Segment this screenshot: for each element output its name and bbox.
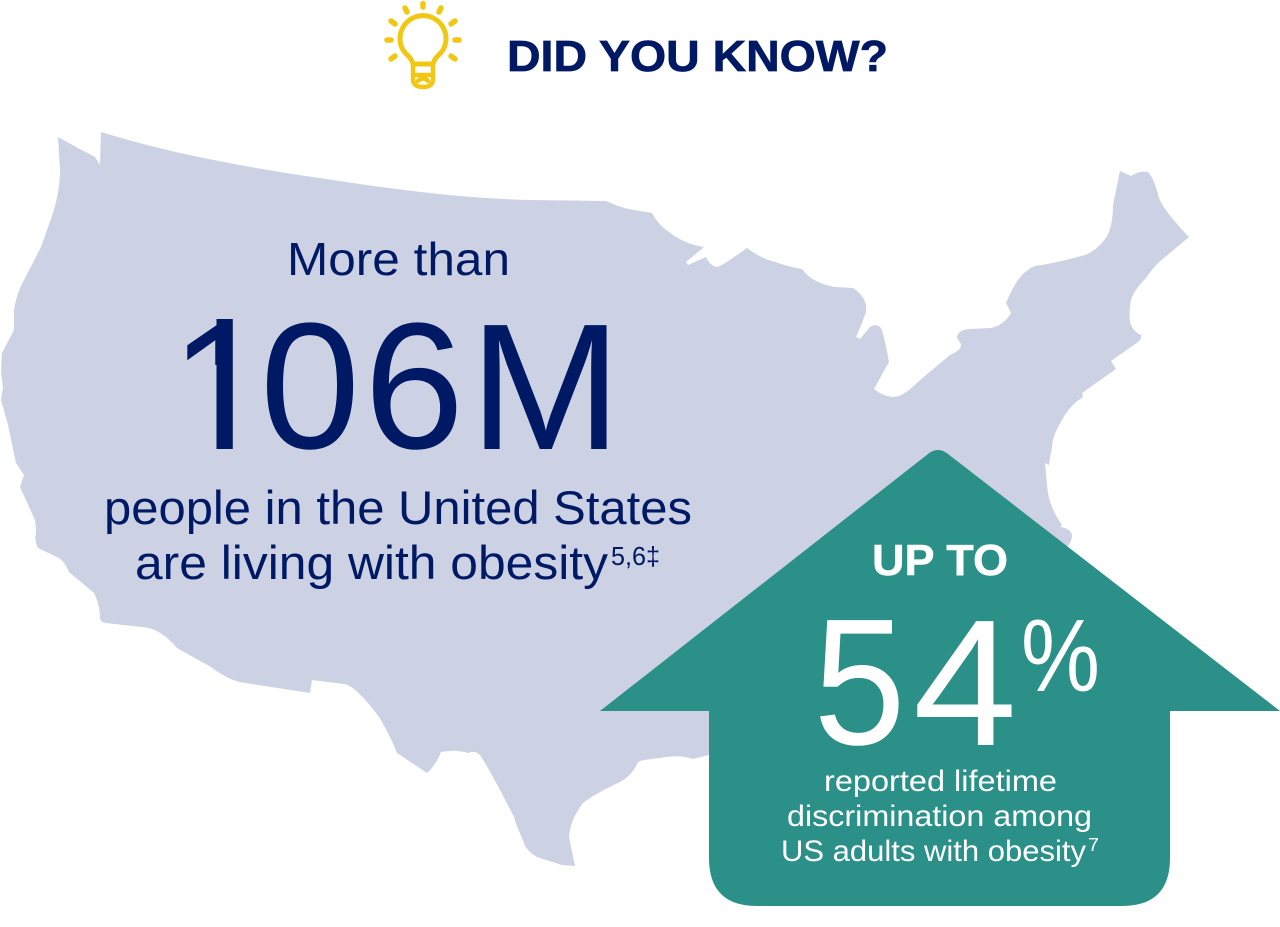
- big number: 106M: 0: [260, 286, 360, 487]
- text: reported lifetime discrimination: US adults with obesity: [781, 835, 1086, 868]
- big number: 106M: M: [470, 287, 622, 488]
- text: reported lifetime discrimination: discrimination among: [787, 800, 1092, 833]
- big number: 106M: [187, 319, 606, 450]
- heading: DID YOU KNOW?: [507, 32, 888, 81]
- panel: header: [387, 4, 888, 87]
- text: more than: More than: [287, 233, 510, 285]
- big number: 54 percent: 4: [913, 583, 1017, 784]
- text: reported lifetime discrimination: 7: [1088, 835, 1099, 855]
- text: up to: UP TO: [872, 536, 1008, 585]
- map of the United States: [1, 132, 1189, 866]
- text: people in the United States: people in the United States: [104, 482, 692, 535]
- panel: upward arrow statistic: [600, 450, 1280, 906]
- text: reported lifetime discrimination: reported lifetime: [824, 765, 1057, 798]
- text: are living with obesity: 5,6‡: [611, 541, 660, 571]
- big number: 54 percent: 5: [814, 582, 906, 783]
- text: reported lifetime discrimination: [781, 765, 1099, 868]
- text: are living with obesity: are living with obesity: [135, 537, 608, 590]
- big number: 106M: 6: [364, 286, 464, 487]
- icon: light bulb: [387, 4, 459, 87]
- big number: 54 percent: %: [1021, 598, 1100, 713]
- big number: 54 percent: [814, 582, 1100, 784]
- arrow shape: [600, 450, 1280, 906]
- big number: 106M: 1: [170, 287, 270, 488]
- panel: US map statistic: [1, 132, 1189, 866]
